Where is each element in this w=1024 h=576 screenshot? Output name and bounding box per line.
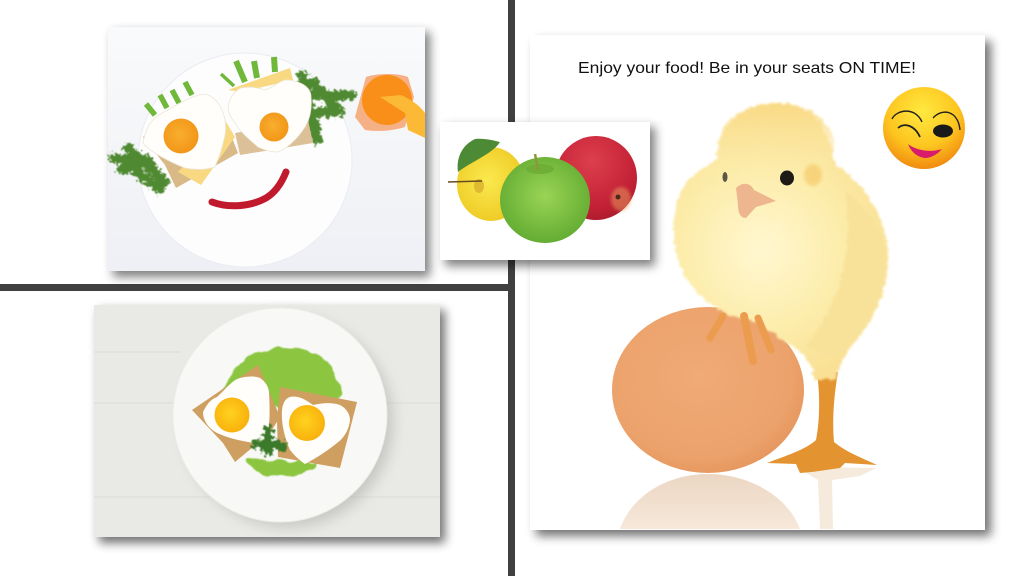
egg reflection [620, 474, 800, 529]
yolk left [164, 118, 198, 154]
eye [780, 170, 794, 186]
stem [526, 154, 554, 174]
lettuce [222, 348, 341, 476]
cheese [178, 120, 235, 185]
plate [173, 308, 387, 522]
parsley [256, 430, 284, 452]
yellow apple [457, 147, 525, 221]
panel: smiley breakfast photo [108, 27, 430, 277]
chive hair [146, 57, 275, 115]
fried egg right [282, 397, 350, 464]
divider: horizontal [0, 284, 508, 291]
leaf [458, 139, 500, 172]
yolk right [289, 405, 325, 441]
fried egg left [143, 94, 226, 169]
leg reflection [796, 467, 876, 529]
ketchup smile [212, 172, 286, 206]
chick toes on egg [710, 316, 771, 361]
fried egg right [228, 80, 311, 152]
beak [736, 184, 776, 218]
toast left [192, 365, 280, 462]
chick cheek [804, 164, 822, 186]
panel: apples photo [440, 122, 655, 266]
chick leg [767, 372, 877, 473]
fried egg left [203, 376, 270, 443]
orange slice [380, 95, 425, 138]
panel: heart eggs on toast photo [94, 305, 445, 543]
juice glass [355, 74, 414, 131]
egg [612, 307, 804, 473]
winking emoji [883, 87, 965, 169]
divider: vertical [508, 0, 515, 576]
caption: Enjoy your food! Be in your seats ON TIME! [578, 60, 916, 77]
far eye [722, 172, 728, 182]
toast right [277, 387, 357, 468]
plate shadow [183, 317, 393, 527]
chick body [674, 103, 888, 380]
toast [143, 105, 238, 188]
apple dimple and stem [448, 179, 484, 193]
panel: chick on egg [530, 35, 991, 536]
green apple [500, 157, 590, 243]
plate [138, 53, 352, 267]
yolk left [214, 398, 250, 432]
yolk right [260, 112, 288, 142]
red apple [555, 136, 637, 220]
herbs: left and right sprigs [114, 75, 352, 190]
